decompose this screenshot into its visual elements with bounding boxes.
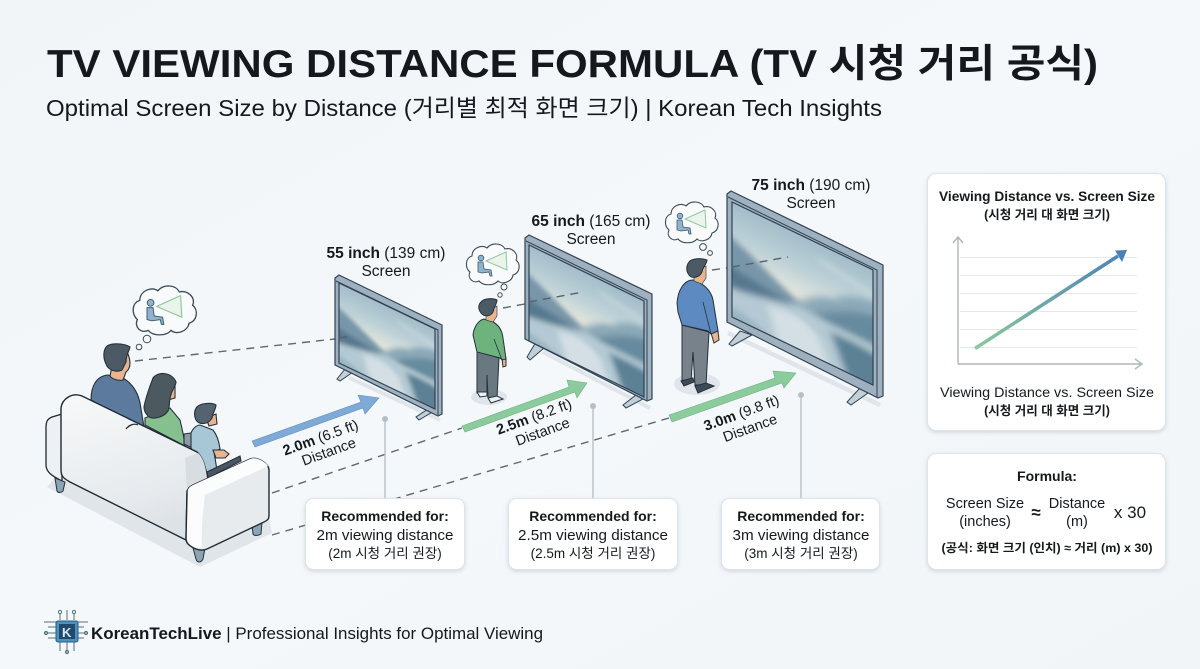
child (184, 403, 241, 478)
line chart (953, 237, 1142, 369)
screen size label: 65 inch (532, 213, 650, 248)
card: recommended 3m: Recommended for: (737, 508, 865, 524)
screen size label: 55 inch: 55 inch (139 cm) (327, 245, 445, 262)
card: recommended 2.5m: (2.5m 시청 거리 권장) (531, 546, 655, 561)
sofa left arm (46, 414, 62, 481)
thought bubble: blue shirt person (665, 202, 718, 255)
chart heading (939, 188, 1155, 222)
card: recommended 2.5m (508, 498, 678, 570)
subtitle: Optimal Screen Size by Distance (거리별 최적 화면 크기) | Korean Tech Insights (46, 95, 882, 121)
panel: viewing distance chart (928, 174, 1166, 430)
connector: 3m (798, 392, 804, 498)
footer logo: chip icon (44, 610, 88, 654)
man (91, 344, 144, 427)
chart caption: (시청 거리 대 화면 크기) (984, 403, 1110, 418)
screen size label: 75 inch: 75 inch (190 cm) (752, 177, 870, 194)
screen size label: 65 inch: Screen (566, 231, 616, 248)
distance label: 2.5m (494, 396, 580, 454)
card: recommended 2m: 2m viewing distance (316, 527, 454, 544)
distance label: 2.0m: 2.0m (6.5 ft) (281, 417, 361, 459)
sofa back (61, 395, 207, 540)
distance label: 2.5m: 2.5m (8.2 ft) (494, 396, 574, 439)
screen size label: 75 inch (752, 177, 870, 212)
distance label: 3.0m: Distance (721, 412, 780, 446)
thought bubble: green shirt person (466, 244, 519, 297)
distance label: 3.0m (702, 393, 787, 451)
chart heading: Viewing Distance vs. Screen Size (939, 188, 1155, 204)
chart heading: (시청 거리 대 화면 크기) (984, 207, 1110, 222)
arrow: 2.0m (252, 395, 379, 447)
panel: formula: (m) (1066, 514, 1088, 530)
connector: 2m (382, 416, 388, 498)
screen size label: 65 inch: 65 inch (165 cm) (532, 213, 650, 230)
screen size label: 55 inch: Screen (361, 263, 411, 280)
title: TV VIEWING DISTANCE FORMULA (TV 시청 거리 공식) (47, 43, 1098, 86)
panel: formula: Screen Size (946, 496, 1024, 512)
card: recommended 3m (722, 498, 880, 570)
distance label: 2.5m: Distance (514, 415, 572, 450)
card: recommended 2m: (2m 시청 거리 권장) (328, 546, 442, 561)
TV: 65 inch (518, 235, 656, 412)
panel: formula: x 30 (1114, 503, 1146, 522)
screen size label: 75 inch: Screen (786, 195, 836, 212)
thought bubble: family (133, 286, 196, 350)
card: recommended 2.5m: Recommended for: (529, 508, 657, 524)
arrow: 3.0m (669, 371, 796, 422)
chart caption (940, 384, 1154, 418)
illustration: family on sofa (46, 344, 272, 567)
distance label: 2.0m (281, 417, 366, 474)
person: blue shirt (674, 259, 720, 395)
distance label: 3.0m: 3.0m (9.8 ft) (702, 393, 782, 435)
woman (144, 373, 185, 446)
distance label: 2.0m: Distance (300, 435, 358, 470)
TV: 75 inch (718, 191, 887, 405)
screen size label: 55 inch (327, 245, 445, 280)
sofa feet (55, 478, 65, 492)
card: recommended 2m: Recommended for: (321, 508, 449, 524)
card: recommended 3m: 3m viewing distance (732, 527, 870, 544)
footer text: KoreanTechLive | Professional Insights for Optimal Viewing (91, 625, 543, 643)
sofa right arm (186, 458, 269, 550)
chart caption: Viewing Distance vs. Screen Size (940, 384, 1154, 400)
dashed sight lines (135, 268, 727, 535)
person: green shirt (471, 299, 507, 405)
panel: formula (928, 454, 1166, 570)
panel: formula: Formula: (1017, 468, 1077, 484)
arrow: 2.5m (462, 380, 587, 432)
sight lines on screens (339, 257, 788, 338)
sofa shadow (47, 470, 272, 567)
panel: formula: ≈ (1031, 503, 1041, 522)
panel: formula: (공식: 화면 크기 (인치) ≈ 거리 (m) x 30) (942, 540, 1152, 555)
card: recommended 2.5m: 2.5m viewing distance (518, 527, 668, 544)
TV: 55 inch (329, 275, 445, 422)
panel: formula: (inches) (959, 514, 1011, 530)
card: recommended 3m: (3m 시청 거리 권장) (744, 546, 858, 561)
footer logo: chip icon: K (62, 625, 72, 640)
panel: formula: Distance (1049, 496, 1105, 512)
card: recommended 2m (306, 498, 464, 570)
connector: 2.5m (590, 403, 596, 498)
